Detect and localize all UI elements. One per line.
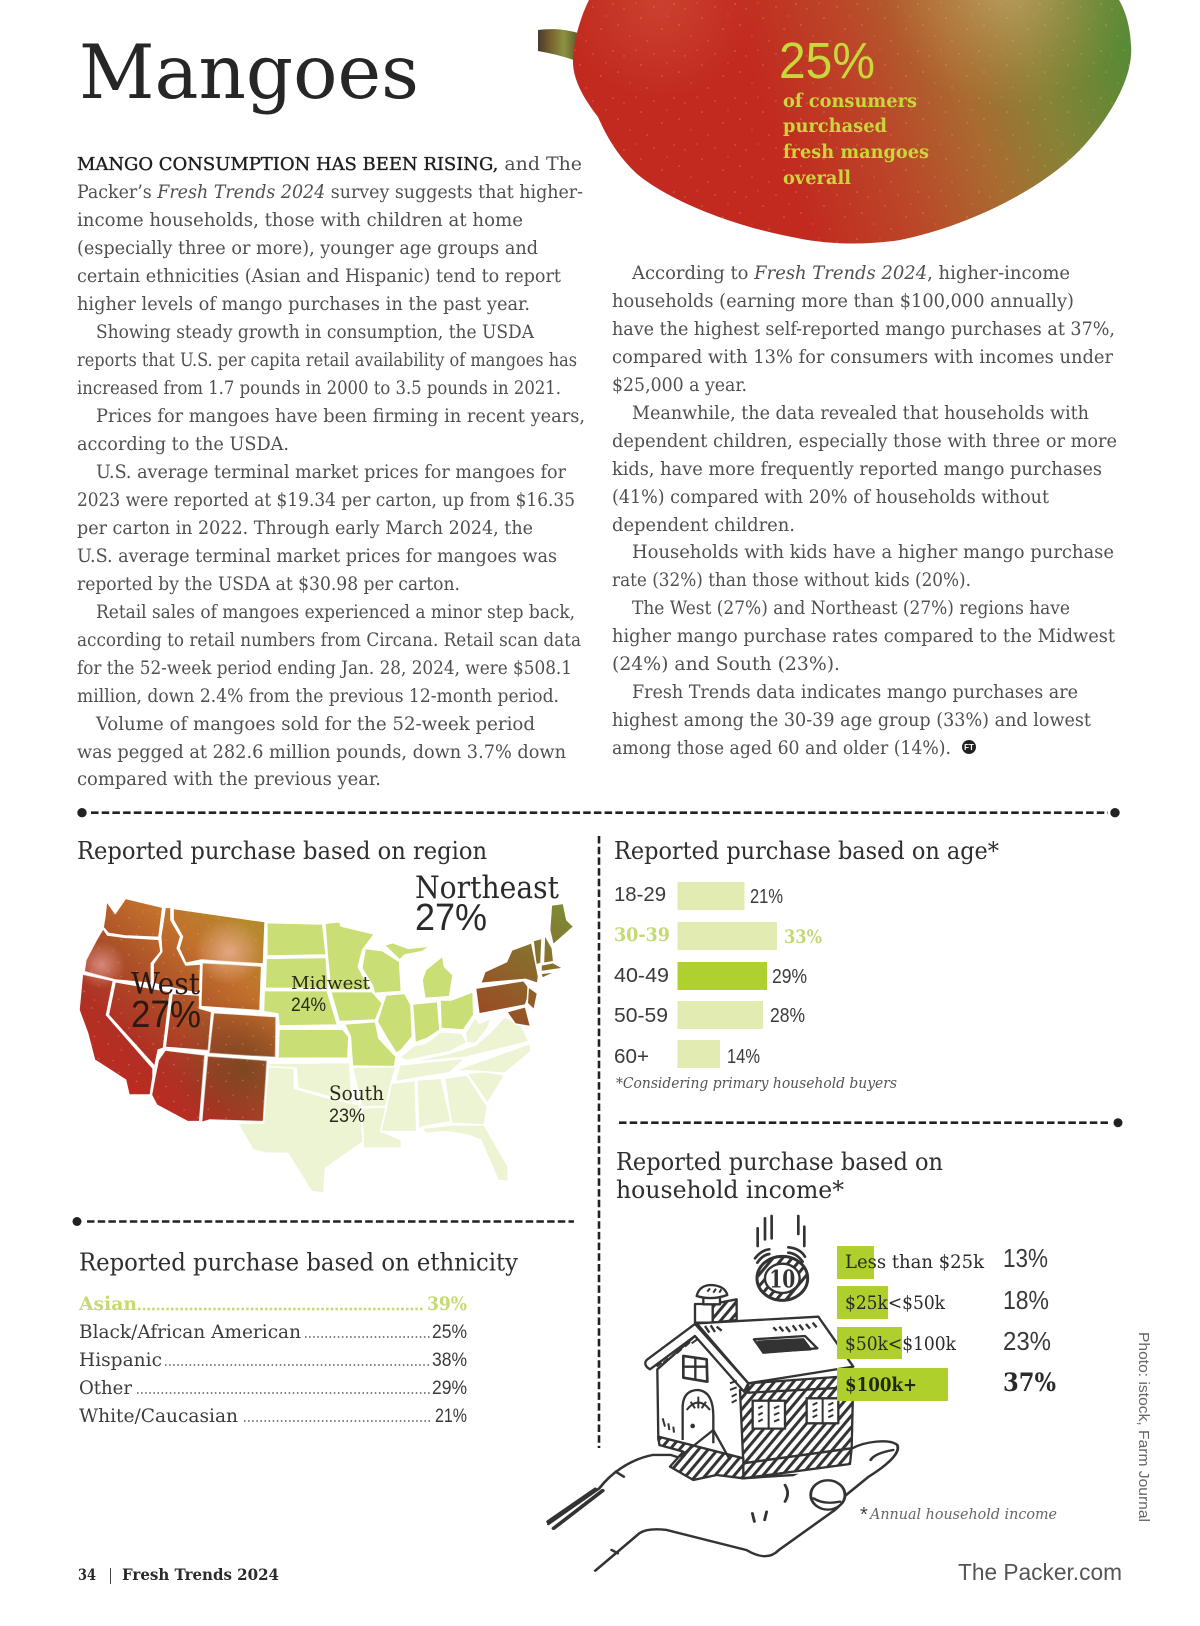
article text: left column: Packer’s Fresh Trends 2024 survey suggests that higher- xyxy=(77,181,583,203)
list: ethnicity rows: 21% xyxy=(435,1406,467,1427)
article text: right column: among those aged 60 and older (14%). xyxy=(612,737,951,759)
article text: left column: certain ethnicities (Asian and Hispanic) tend to report xyxy=(77,265,561,287)
article text: right column: $25,000 a year. xyxy=(612,374,747,396)
bar chart: age xyxy=(614,882,822,1068)
roof xyxy=(645,1317,853,1403)
list: ethnicity rows: 38% xyxy=(432,1350,467,1371)
legend bars: income xyxy=(837,1246,985,1401)
windows and door xyxy=(663,1356,838,1460)
article text: left column: Showing steady growth in consumption, the USDA xyxy=(96,321,535,343)
callout: 25% of consumers: overall xyxy=(783,167,852,189)
panel: purchase by region xyxy=(77,837,574,1193)
footnote: age: *Considering primary household buyers xyxy=(616,1074,897,1092)
list: ethnicity rows: Asian xyxy=(78,1293,137,1315)
heading: household income: Reported purchase based on xyxy=(616,1148,943,1176)
article text: left column: for the 52-week period ending Jan. 28, 2024, were $508.1 xyxy=(77,657,572,679)
article text: right column: Households with kids have a higher mango purchase xyxy=(632,541,1114,563)
heading: household income xyxy=(616,1148,943,1204)
label: South 23% xyxy=(329,1081,384,1127)
list: ethnicity rows: Black/African American xyxy=(79,1321,301,1343)
label: West 27% xyxy=(131,967,201,1036)
heading: ethnicity: Reported purchase based on ethnicity xyxy=(79,1248,518,1276)
article text: left column: according to the USDA. xyxy=(77,433,289,455)
mango body xyxy=(573,0,1131,244)
title: Mangoes xyxy=(79,28,419,116)
article text: right column: Meanwhile, the data revealed that households with xyxy=(632,402,1089,424)
footer: website: The Packer.com xyxy=(958,1559,1122,1585)
article text: right column: households (earning more than $100,000 annually) xyxy=(612,290,1074,312)
article text: left column: reported by the USDA at $30.98 per carton. xyxy=(77,573,460,595)
article text: right column: (41%) compared with 20% of households without xyxy=(612,486,1049,508)
values: income percentages xyxy=(1003,1243,1056,1397)
illustration: hand xyxy=(548,1441,898,1571)
panel: purchase by household income xyxy=(548,1148,1057,1571)
label: Midwest 24%: Midwest xyxy=(291,973,371,994)
icon: falling coin xyxy=(755,1216,808,1300)
bar chart: age: 29% xyxy=(772,966,807,988)
legend bars: income: $50k<$100k xyxy=(845,1333,957,1355)
bar chart: age: 60+ xyxy=(614,1046,649,1068)
bar chart: age: 33% xyxy=(784,926,822,948)
illustration: falling coin and house xyxy=(645,1216,853,1480)
article text: right column: higher mango purchase rates compared to the Midwest xyxy=(612,625,1115,647)
bar chart: age: 21% xyxy=(750,886,783,908)
panel: purchase by ethnicity xyxy=(78,1248,518,1427)
list: ethnicity rows: Hispanic xyxy=(79,1349,162,1371)
article text: left column: Prices for mangoes have been firming in recent years, xyxy=(96,405,585,427)
article text: left column: compared with the previous year. xyxy=(77,768,381,790)
bar chart: age: 30-39 xyxy=(614,924,670,946)
heading: region: Reported purchase based on region xyxy=(77,837,487,865)
article text: left column: U.S. average terminal market prices for mangoes was xyxy=(77,545,557,567)
article text: right column: According to Fresh Trends 2024 , higher-income xyxy=(631,262,1070,284)
article text: left column: higher levels of mango purchases in the past year. xyxy=(77,293,530,315)
map: South region xyxy=(238,1017,531,1193)
heading: age: Reported purchase based on age* xyxy=(614,837,999,865)
map: Northeast region xyxy=(475,903,574,1027)
article text: left column: income households, those with children at home xyxy=(77,209,523,231)
article text: left column: Volume of mangoes sold for the 52-week period xyxy=(95,713,535,735)
footer: page number and section: Fresh Trends 2024 xyxy=(122,1565,279,1584)
legend bars: income: Less than $25k xyxy=(845,1251,985,1273)
article text: right column: highest among the 30-39 age group (33%) and lowest xyxy=(612,709,1091,731)
icon: house xyxy=(645,1285,853,1480)
article text: right column xyxy=(612,262,1117,759)
callout: 25% of consumers: 25% xyxy=(779,32,875,89)
article text: right column: dependent children. xyxy=(612,514,795,536)
article text: right column: rate (32%) than those without kids (20%). xyxy=(612,569,971,591)
label: Northeast 27%: Northeast xyxy=(415,870,559,906)
photo credit: Photo: istock, Farm Journal xyxy=(1135,1332,1152,1522)
icon: falling coin: 10 xyxy=(769,1264,795,1293)
values: income percentages: 13% xyxy=(1003,1243,1048,1273)
list: ethnicity rows: Other xyxy=(79,1377,133,1399)
footnote: income: Annual household income xyxy=(868,1505,1057,1523)
values: income percentages: 18% xyxy=(1003,1285,1049,1315)
article text: right column: The West (27%) and Northeast (27%) regions have xyxy=(632,597,1070,619)
map: Midwest region xyxy=(263,922,474,1067)
article text: left column: according to retail numbers from Circana. Retail scan data xyxy=(77,629,581,651)
article text: left column xyxy=(77,153,585,790)
bar chart: age: 14% xyxy=(727,1046,760,1068)
label: Northeast 27% xyxy=(415,870,559,939)
label: Midwest 24% xyxy=(291,973,371,1016)
callout: 25% of consumers: fresh mangoes xyxy=(783,141,929,163)
label: South 23%: 23% xyxy=(329,1106,365,1127)
walls xyxy=(657,1336,853,1480)
list: ethnicity rows: 25% xyxy=(432,1322,467,1343)
article text: right column: dependent children, especially those with three or more xyxy=(612,430,1117,452)
list: ethnicity rows: 29% xyxy=(432,1378,467,1399)
article text: right column: Fresh Trends data indicates mango purchases are xyxy=(632,681,1078,703)
list: ethnicity rows: 39% xyxy=(427,1293,467,1315)
article text: left column: increased from 1.7 pounds in 2000 to 3.5 pounds in 2021. xyxy=(77,377,561,399)
legend bars: income: $100k+ xyxy=(845,1374,917,1396)
article text: left column: was pegged at 282.6 million pounds, down 3.7% down xyxy=(77,741,566,763)
article text: left column: (especially three or more), younger age groups and xyxy=(77,237,538,259)
article text: left column: Retail sales of mangoes experienced a minor step back, xyxy=(96,601,575,623)
values: income percentages: 23% xyxy=(1003,1326,1051,1356)
list: ethnicity rows: White/Caucasian xyxy=(79,1405,238,1427)
heading: household income: household income* xyxy=(616,1176,844,1204)
label: South 23%: South xyxy=(329,1081,384,1105)
panel: purchase by age xyxy=(614,837,999,1092)
article text: right column: compared with 13% for consumers with incomes under xyxy=(612,346,1114,368)
article text: left column: million, down 2.4% from the previous 12-month period. xyxy=(77,685,559,707)
bar chart: age: 18-29 xyxy=(614,884,666,906)
bar chart: age: 50-59 xyxy=(614,1005,668,1027)
article text: right column: kids, have more frequently reported mango purchases xyxy=(612,458,1102,480)
bar chart: age: 28% xyxy=(770,1005,805,1027)
callout: 25% of consumers xyxy=(779,32,929,189)
values: income percentages: 37% xyxy=(1003,1368,1056,1397)
callout: 25% of consumers: of consumers xyxy=(783,90,917,112)
label: Midwest 24%: 24% xyxy=(291,995,326,1016)
callout: 25% of consumers: purchased xyxy=(783,115,887,137)
icon: FT end mark xyxy=(962,740,976,754)
map of the United States xyxy=(79,898,574,1193)
label: Northeast 27%: 27% xyxy=(415,897,487,939)
map: West region xyxy=(79,898,276,1123)
list: ethnicity rows xyxy=(78,1293,467,1427)
footnote: income: * xyxy=(860,1504,868,1526)
chimney xyxy=(695,1285,737,1323)
icon: mango stem xyxy=(538,29,578,60)
bar chart: age: 40-49 xyxy=(614,965,669,987)
icon: FT end mark: FT xyxy=(964,743,974,752)
article text: left column: MANGO CONSUMPTION HAS BEEN RISING, and The xyxy=(77,153,582,175)
article text: left column: reports that U.S. per capita retail availability of mangoes has xyxy=(77,349,577,371)
article text: left column: per carton in 2022. Through early March 2024, the xyxy=(77,517,533,539)
mango photo with callout xyxy=(538,0,1131,244)
article text: left column: U.S. average terminal market prices for mangoes for xyxy=(96,461,567,483)
article text: right column: have the highest self-reported mango purchases at 37%, xyxy=(612,318,1115,340)
article text: right column: (24%) and South (23%). xyxy=(612,653,840,675)
label: West 27%: 27% xyxy=(131,994,201,1036)
article text: left column: 2023 were reported at $19.34 per carton, up from $16.35 xyxy=(77,489,575,511)
label: West 27%: West xyxy=(131,967,200,1002)
footer: page number and section: 34 xyxy=(78,1565,96,1584)
legend bars: income: $25k<$50k xyxy=(845,1292,946,1314)
